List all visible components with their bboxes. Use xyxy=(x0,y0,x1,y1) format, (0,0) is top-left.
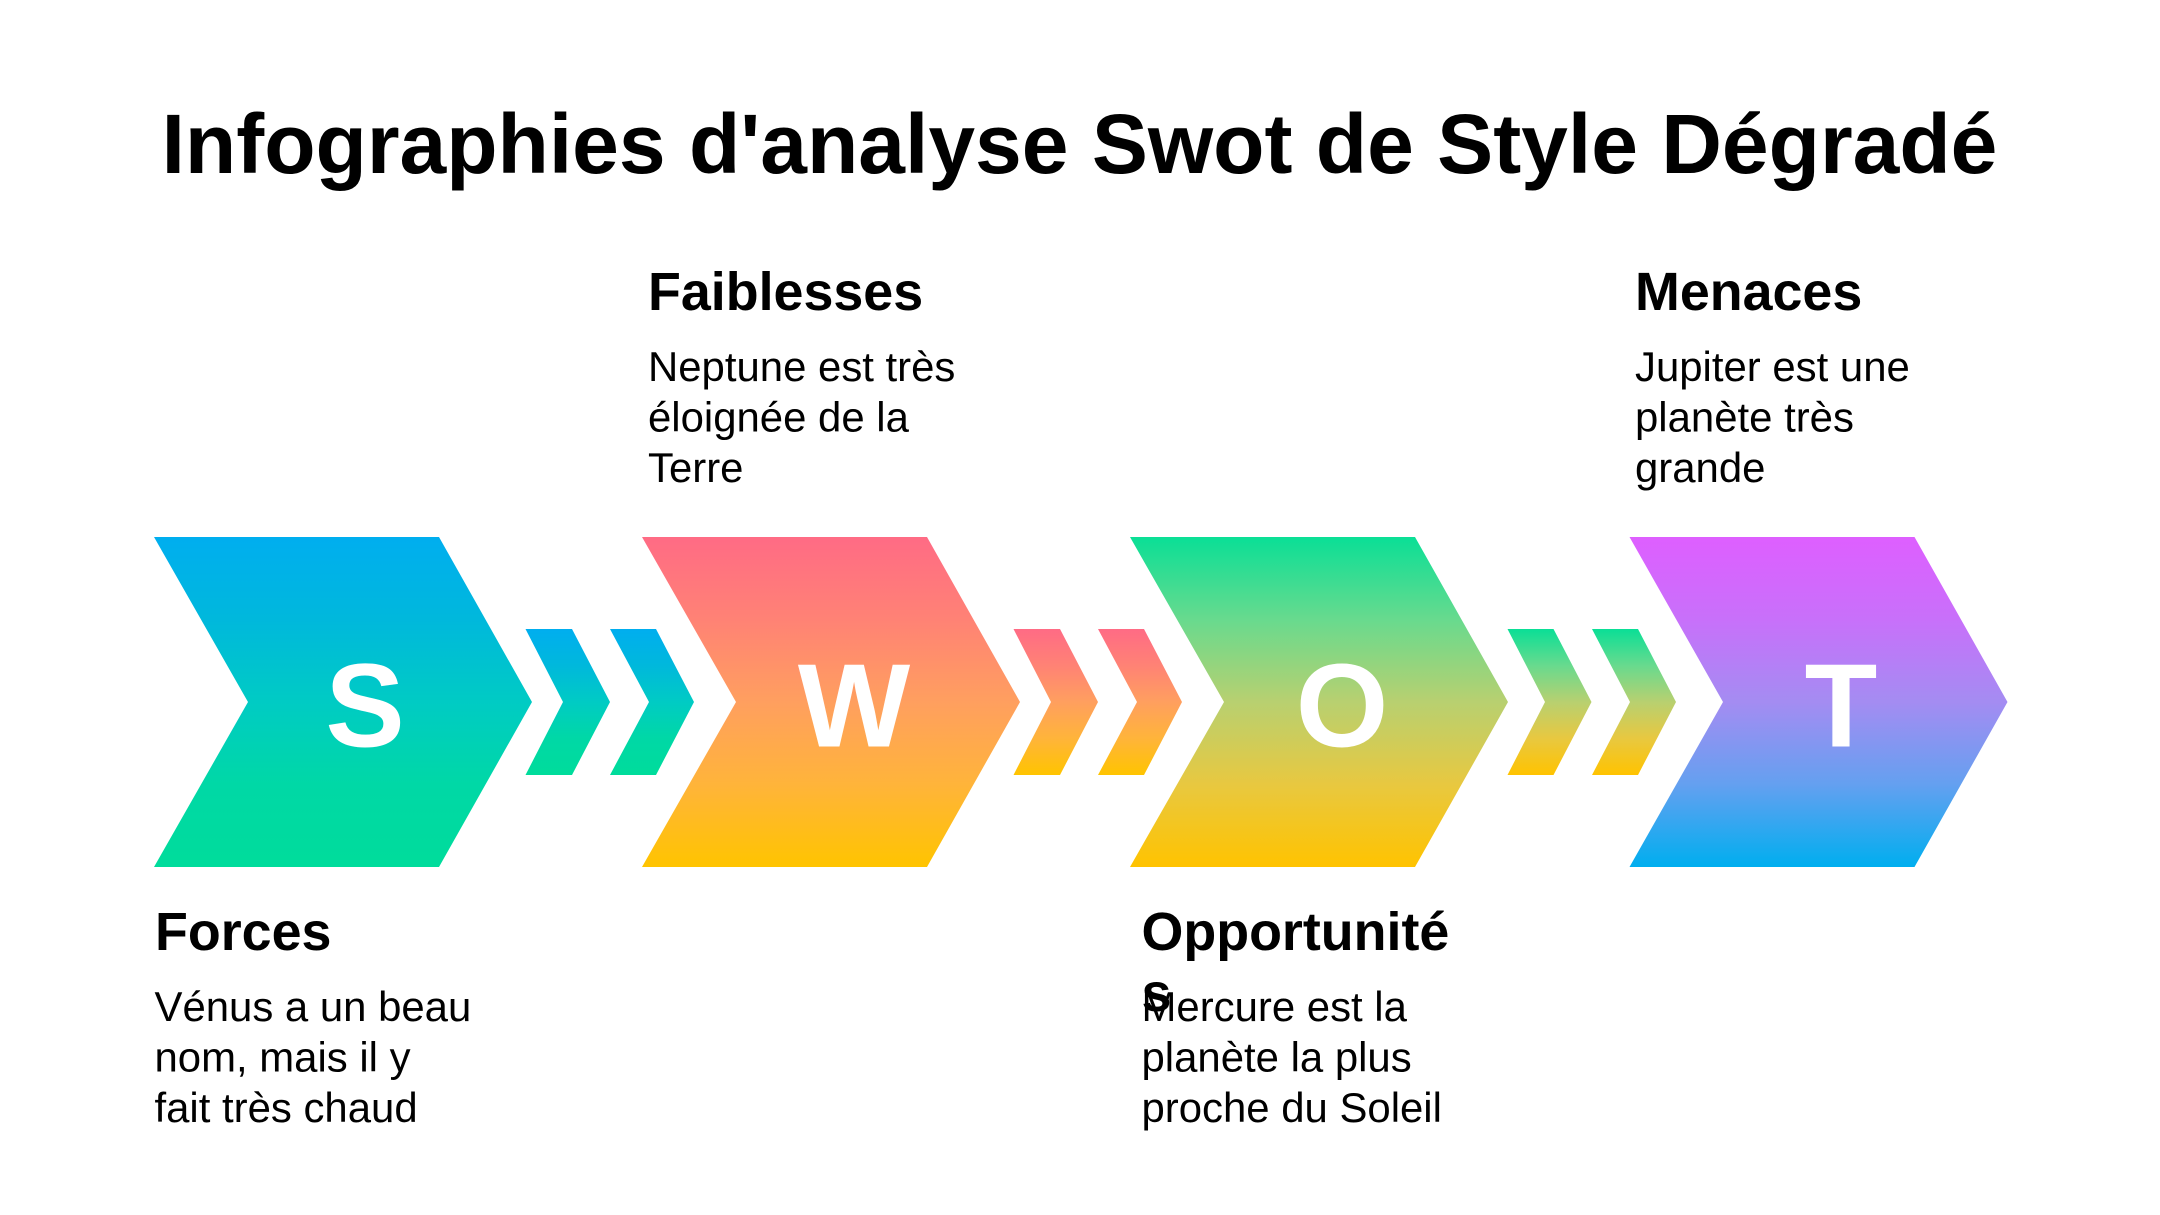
text: Forces description: Vénus a un beau xyxy=(154,983,471,1030)
letter O: O xyxy=(1296,640,1388,772)
text: Forces description: fait très chaud xyxy=(154,1084,418,1131)
text: Menaces description: grande xyxy=(1635,444,1765,491)
text: Opportunités description: planète la plus xyxy=(1142,1034,1412,1080)
panel: forces text xyxy=(154,902,471,1131)
heading: Opportunités (wrapped): Opportunité xyxy=(1142,902,1449,962)
text: Faiblesses description: Terre xyxy=(648,444,743,491)
text: Opportunités description: proche du Soleil xyxy=(1142,1084,1442,1131)
text: Menaces description: Jupiter est une xyxy=(1635,343,1910,390)
heading: Faiblesses: Faiblesses xyxy=(648,262,923,322)
text: Faiblesses description: Neptune est très xyxy=(648,343,955,390)
letter S: S xyxy=(325,640,405,772)
letter T: T xyxy=(1805,640,1877,772)
heading: Opportunités (wrapped): s xyxy=(1142,963,1171,1023)
text: Forces description: nom, mais il y xyxy=(154,1034,411,1080)
heading: Forces: Forces xyxy=(155,902,331,962)
chevron W xyxy=(642,537,1020,867)
text: Opportunités description: Mercure est la xyxy=(1142,983,1408,1030)
text: Faiblesses description: éloignée de la xyxy=(648,394,910,440)
title: Infographies d'analyse Swot de Style Dégradé xyxy=(162,97,1997,191)
chevron O xyxy=(1130,537,1508,867)
small arrows after S xyxy=(526,629,694,775)
chevron T xyxy=(1630,537,2008,867)
small arrows after W xyxy=(1014,629,1182,775)
heading: Menaces: Menaces xyxy=(1635,262,1862,322)
chevron S xyxy=(154,537,532,867)
small arrows after O xyxy=(1508,629,1676,775)
text: Menaces description: planète très xyxy=(1635,394,1854,440)
panel: menaces text xyxy=(1635,262,1910,491)
panel: opportunités text xyxy=(1142,902,1449,1131)
panel: faiblesses text xyxy=(648,262,955,491)
letter W: W xyxy=(798,640,911,772)
